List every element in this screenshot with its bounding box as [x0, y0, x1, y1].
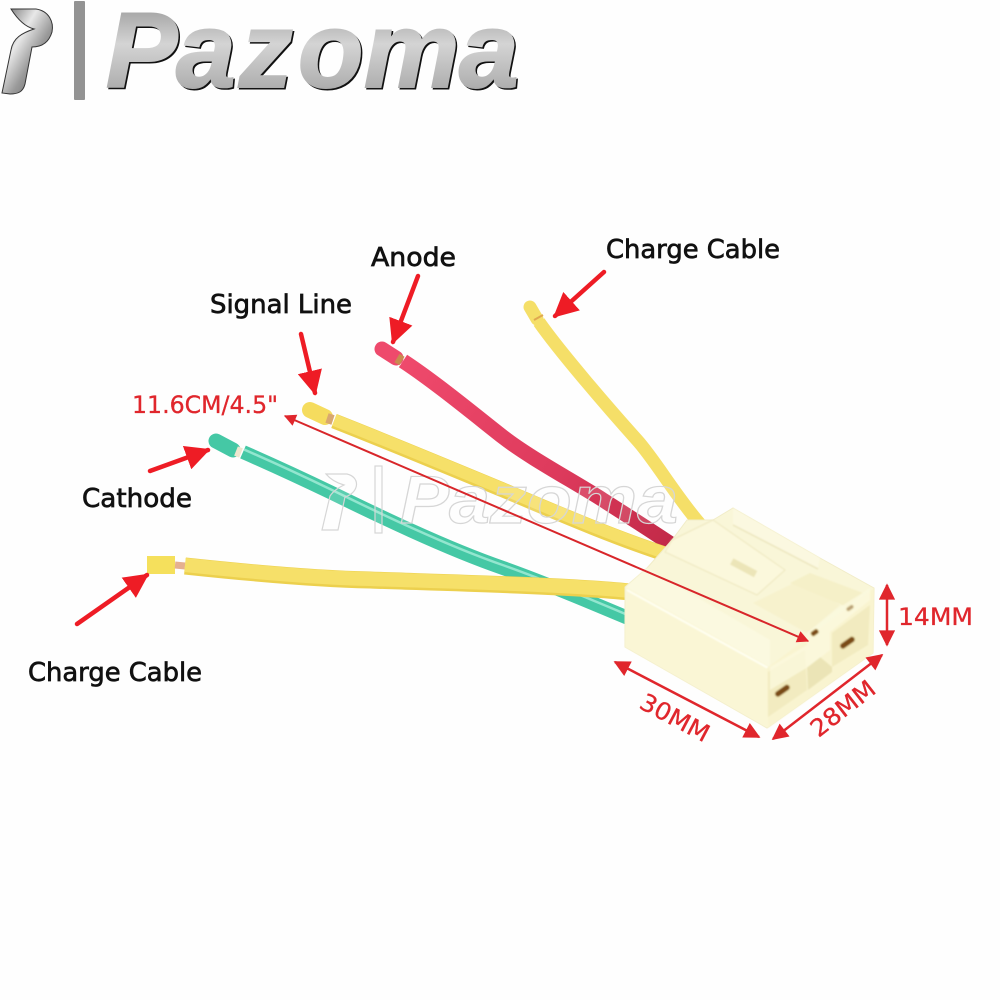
- callout: Anode: [371, 243, 456, 342]
- callout: Charge Cable bottom: [28, 575, 202, 688]
- connector top channel: [753, 580, 840, 633]
- connector latch: [665, 520, 785, 595]
- callout: Charge Cable bottom: Charge Cable: [28, 658, 202, 688]
- callout: Signal Line: Signal Line: [210, 290, 352, 320]
- front recess lower left: [768, 650, 807, 717]
- callout: Cathode: [82, 450, 208, 514]
- callout: Cathode: Cathode: [82, 484, 192, 514]
- dimension: 28MM: [773, 655, 882, 743]
- connector left face shoulder highlight: [626, 568, 770, 667]
- watermark: Pazoma: [400, 462, 678, 538]
- dimension: 11.6CM/4.5" length arrow: [132, 391, 808, 641]
- connector left face: [625, 587, 770, 728]
- callout: Signal Line: [210, 290, 352, 393]
- connector front face: [767, 588, 874, 728]
- dimension text: cable length: 11.6CM/4.5": [132, 391, 278, 419]
- logo: Pazoma: [2, 0, 520, 112]
- dimension: 28MM: 28MM: [805, 675, 881, 743]
- connector left edge line: [627, 590, 770, 669]
- callout: Anode: Anode: [371, 243, 456, 273]
- dimension: 14MM: 14MM: [898, 603, 973, 631]
- wire: red anode: [382, 349, 674, 546]
- front centre gap: [807, 657, 832, 690]
- dimension: 30MM: 30MM: [635, 688, 714, 748]
- callout: Charge Cable top: [555, 235, 780, 316]
- latch slot: [730, 558, 757, 577]
- dimension: 30MM: [615, 662, 759, 748]
- icon: P mark: [2, 9, 52, 94]
- connector top ridge: [733, 508, 820, 569]
- connector back channel: [790, 573, 863, 607]
- wire: green cathode: [216, 441, 629, 618]
- dimension: 14MM: [887, 585, 973, 645]
- connector pin sockets: [774, 604, 856, 698]
- front ledge: [770, 588, 870, 690]
- front recess right: [832, 605, 870, 667]
- callout: Charge Cable top: Charge Cable: [606, 235, 780, 265]
- connector silhouette: [625, 508, 874, 728]
- wire: yellow signal line: [310, 410, 668, 555]
- wire: yellow charge cable bottom: [147, 565, 630, 592]
- wire: yellow charge cable top: [530, 307, 700, 524]
- logo divider bar: [74, 1, 85, 100]
- connector housing: [625, 508, 874, 728]
- connector details: [625, 508, 874, 728]
